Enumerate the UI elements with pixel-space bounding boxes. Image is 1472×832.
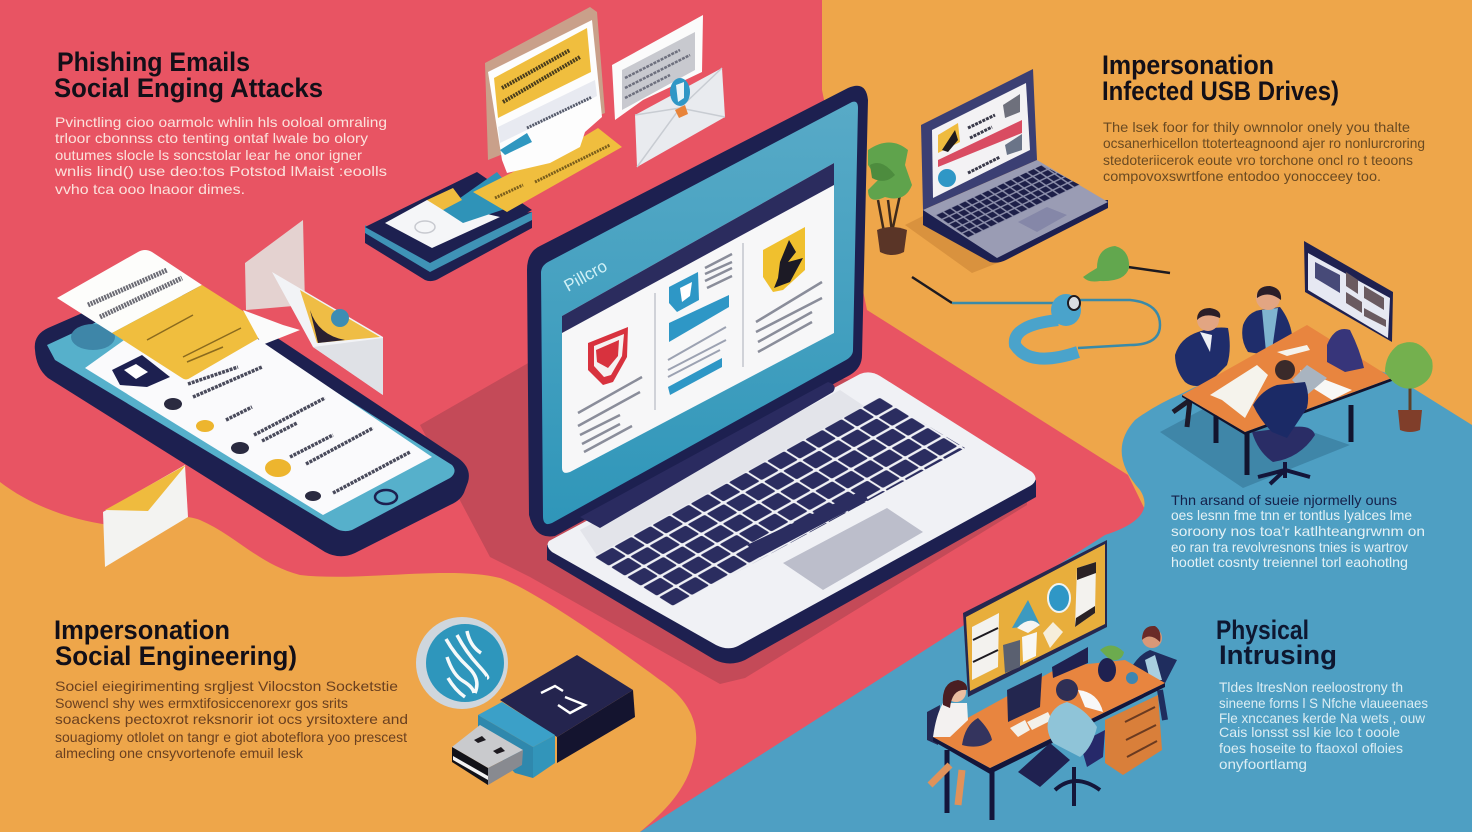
heading: phishing emails [54,47,323,103]
text: social engineering body [55,678,408,761]
phone list rows [164,367,410,501]
text: phishing emails body: vvho tca ooo lnaoor dimes. [55,181,245,197]
heading: impersonation infected usb: Impersonation [1102,50,1274,80]
usb collar [478,702,555,778]
small-laptop shadow [905,215,1000,273]
text: meeting body: eo ran tra revolvresnons tnies is wartrov [1171,539,1408,555]
papers and laptop on table [1210,345,1352,418]
laptop screen [541,102,858,524]
phone [35,275,469,556]
heading: phishing emails: Phishing Emails [57,47,250,77]
heading: impersonation social engineering [54,615,297,671]
woman left chair [927,705,940,745]
envelope by phone [243,220,383,395]
wall monitor [1304,241,1393,342]
background: orange top right [822,0,1472,520]
blue badge [669,272,699,312]
text: meeting body: oes lesnn fme tnn er tontlus lyalces lme [1171,507,1412,523]
office scene [927,540,1177,820]
text: meeting body: soroony nos toa'r katlhteangrwnm on [1171,523,1425,539]
laptop shadow [420,362,1027,684]
text: phishing emails body: Pvinctling cioo oarmolc whlin hls ooloal omraling [55,114,387,130]
wall board [963,540,1107,697]
text: meeting body: hootlet cosnty treiennel torl eaohotlng [1171,554,1408,570]
blue button [669,295,729,342]
text: phishing emails body: outumes slocle ls soncstolar lear he onor igner [55,147,362,163]
person left [1173,308,1230,427]
text: usb body: ocsanerhicellon ttoterteagnoond ajer ro nonlurcroring [1103,135,1425,151]
woman left [930,680,968,805]
background: blue bottom right [640,340,1472,832]
usb body [500,655,635,763]
text: physical body: Tldes ltresNon reeloostrony th [1219,679,1403,695]
text: social engineering body: souagiomy otlolet on tangr e giot aboteflora yoo prescest [55,729,407,745]
usb badge [416,617,508,709]
screen panel [562,163,834,473]
green blob [1083,246,1129,282]
desk [933,660,1165,820]
small laptop base [923,160,1108,263]
envelope bottom left [103,465,188,567]
text: physical body: sineene forns l S Nfche vlaueenaes [1219,695,1428,711]
text: physical body: Cais lonsst ssl kie lco t ooole [1219,724,1400,740]
heading: impersonation infected usb: Infected USB Drives) [1102,76,1339,106]
touchpad [783,508,923,590]
main laptop [527,86,1036,663]
phone screen [47,288,455,531]
heading: impersonation social engineering: Social Engineering) [55,641,297,671]
text: phishing emails body: trloor cbonnss cto tenting ontaf lwale bo olory [55,130,368,146]
yellow shield [763,227,805,292]
heading: impersonation infected usb [1102,50,1339,106]
USB drive [416,617,635,785]
cable and accessory [912,246,1170,359]
text: social engineering body: soackens pectoxrot reksnorir iot ocs yrsitoxtere and [55,711,408,727]
man front [1018,679,1105,806]
desk plant and bag [962,645,1138,747]
person front [1252,360,1315,484]
desk monitors [1007,647,1088,737]
keyboard [593,397,965,607]
laptop lid [527,86,868,537]
heading: physical intrusing [1216,615,1337,670]
heading: impersonation social engineering: Impersonation [54,615,230,645]
text: social engineering body: Sociel eiegirimenting srgljest Vilocston Socketstie [55,678,398,694]
text: meeting body [1171,492,1425,570]
text: social engineering body: almecling one cnsyvortenofe emuil lesk [55,745,304,761]
phone white content [85,293,432,515]
text: usb body: The lsek foor for thily ownnolor onely you thalte [1103,119,1410,135]
text: physical body: foes hoseite to ftaoxol ofloies [1219,740,1403,756]
meeting table shadow [1160,400,1350,488]
meeting table [1182,325,1392,475]
laptop base [547,372,1036,664]
text: physical body: Fle xnccanes kerde Na wets , ouw [1219,710,1426,726]
meeting scene [1173,241,1433,484]
text: usb body [1103,119,1425,184]
document top [485,7,605,173]
plant right [1385,342,1433,432]
heading: physical intrusing: Intrusing [1219,640,1337,670]
text: phishing emails body [54,114,387,197]
text: usb body: compovoxswrtfone entodoo yonocceey too. [1103,168,1381,184]
small phone top [365,172,532,281]
desk back people [1130,626,1177,720]
screen title: Pillcro [561,256,610,295]
bag on table [1327,329,1364,372]
text: meeting body: Thn arsand of sueie njormelly ouns [1171,492,1397,508]
yellow card [473,128,622,212]
blue clip [1015,320,1078,359]
envelope top right [635,68,725,167]
screen text lines [578,377,642,452]
text: phishing emails body: wnlis lind() use deo:tos Potstod lMaist :eoolls [54,163,387,179]
phone home button [375,490,397,504]
text: physical body: onyfoortlamg [1219,756,1307,772]
person centre [1242,286,1292,355]
text: usb body: stedoteriicerok eoute vro torchone oncl ro t teoons [1103,152,1413,168]
red shield [588,327,628,385]
usb connector [452,725,523,785]
plant top [868,142,912,255]
paper top right [612,15,703,120]
phone app icon [112,355,170,387]
text: physical body [1219,679,1428,772]
text: social engineering body: Sowencl shy wes ermxtifosiccenorexr gos srits [55,695,348,711]
small phone screen [385,200,500,248]
small laptop lid [921,69,1037,210]
laptop hinge [580,382,835,528]
small laptop top right [921,69,1108,263]
heading: physical intrusing: Physical [1216,615,1309,645]
letter on phone [57,250,273,380]
heading: phishing emails: Social Enging Attacks [54,73,323,103]
background: orange bottom left [0,482,696,832]
